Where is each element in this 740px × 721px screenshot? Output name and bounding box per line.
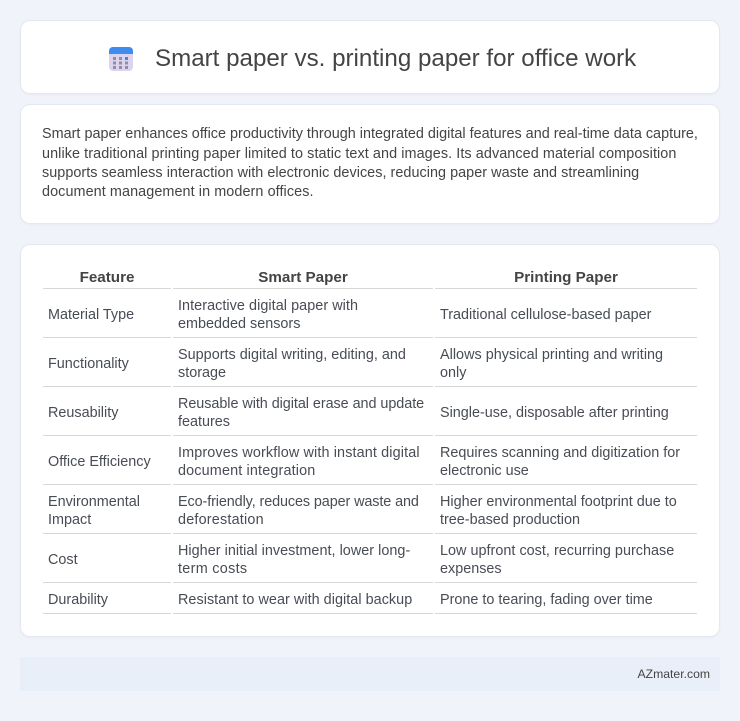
row: Material Type: embedded sensors: [178, 316, 300, 332]
row: Cost: term costs: [178, 561, 247, 577]
row: Cost: Cost: [48, 552, 78, 568]
row: Environmental Impact: Higher environmental footprint due to: [440, 494, 677, 510]
row: Office Efficiency: [48, 445, 680, 479]
title panel: [20, 20, 720, 94]
row: Office Efficiency: Improves workflow with instant digital: [178, 445, 420, 461]
summary text: Smart paper enhances office productivity through integrated digital features and real-time data capture,: [42, 126, 698, 142]
row: Cost: Low upfront cost, recurring purchase: [440, 543, 674, 559]
row: Functionality: only: [440, 365, 466, 381]
row: Office Efficiency: document integration: [178, 463, 315, 479]
row: Reusability: Reusability: [48, 405, 118, 421]
row: Functionality: storage: [178, 365, 226, 381]
row: Environmental Impact: Eco-friendly, reduces paper waste and: [178, 494, 419, 510]
row: Reusability: features: [178, 414, 230, 430]
row: Environmental Impact: deforestation: [178, 512, 264, 528]
row: Cost: [48, 543, 674, 577]
row: Environmental Impact: Impact: [48, 512, 91, 528]
row: Functionality: [48, 347, 663, 381]
footer bar: [20, 657, 720, 691]
icon: calendar: [109, 47, 133, 71]
summary text: unlike traditional printing paper limited to static text and images. Its advanced material composition: [42, 146, 676, 162]
row: Reusability: [48, 396, 669, 430]
row: Material Type: [48, 298, 652, 332]
title: Smart paper vs. printing paper for office work: [155, 45, 636, 72]
row: Functionality: Supports digital writing, editing, and: [178, 347, 406, 363]
row: Functionality: Functionality: [48, 356, 129, 372]
row: Cost: expenses: [440, 561, 502, 577]
panel: summary: [20, 104, 720, 224]
summary text: supports seamless interaction with electronic devices, reducing paper waste and streamlining: [42, 165, 639, 181]
row: Office Efficiency: Office Efficiency: [48, 454, 151, 470]
row: Functionality: Allows physical printing and writing: [440, 347, 663, 363]
row: Environmental Impact: tree-based production: [440, 512, 580, 528]
row: Office Efficiency: electronic use: [440, 463, 529, 479]
summary text: document management in modern offices.: [42, 184, 314, 200]
row: Durability: Prone to tearing, fading over time: [440, 592, 653, 608]
row: Office Efficiency: Requires scanning and digitization for: [440, 445, 680, 461]
row: Cost: Higher initial investment, lower long-: [178, 543, 410, 559]
table: [43, 269, 697, 614]
footer brand: AZmater.com: [638, 667, 710, 681]
panel: comparison table: [20, 244, 720, 637]
row: Material Type: Interactive digital paper with: [178, 298, 358, 314]
row: Durability: Durability: [48, 592, 108, 608]
column headers: Smart Paper: [258, 269, 348, 286]
column headers: Feature: [80, 269, 134, 286]
row: Material Type: Material Type: [48, 307, 134, 323]
row: Reusability: Single-use, disposable after printing: [440, 405, 669, 421]
row: Environmental Impact: [48, 494, 677, 528]
row: Reusability: Reusable with digital erase and update: [178, 396, 424, 412]
column headers: Printing Paper: [514, 269, 618, 286]
row: Material Type: Traditional cellulose-based paper: [440, 307, 651, 323]
row: Durability: Resistant to wear with digital backup: [178, 592, 412, 608]
column headers: [80, 269, 618, 286]
row: Environmental Impact: Environmental: [48, 494, 140, 510]
row: Durability: [48, 592, 653, 608]
summary text: [42, 126, 698, 200]
